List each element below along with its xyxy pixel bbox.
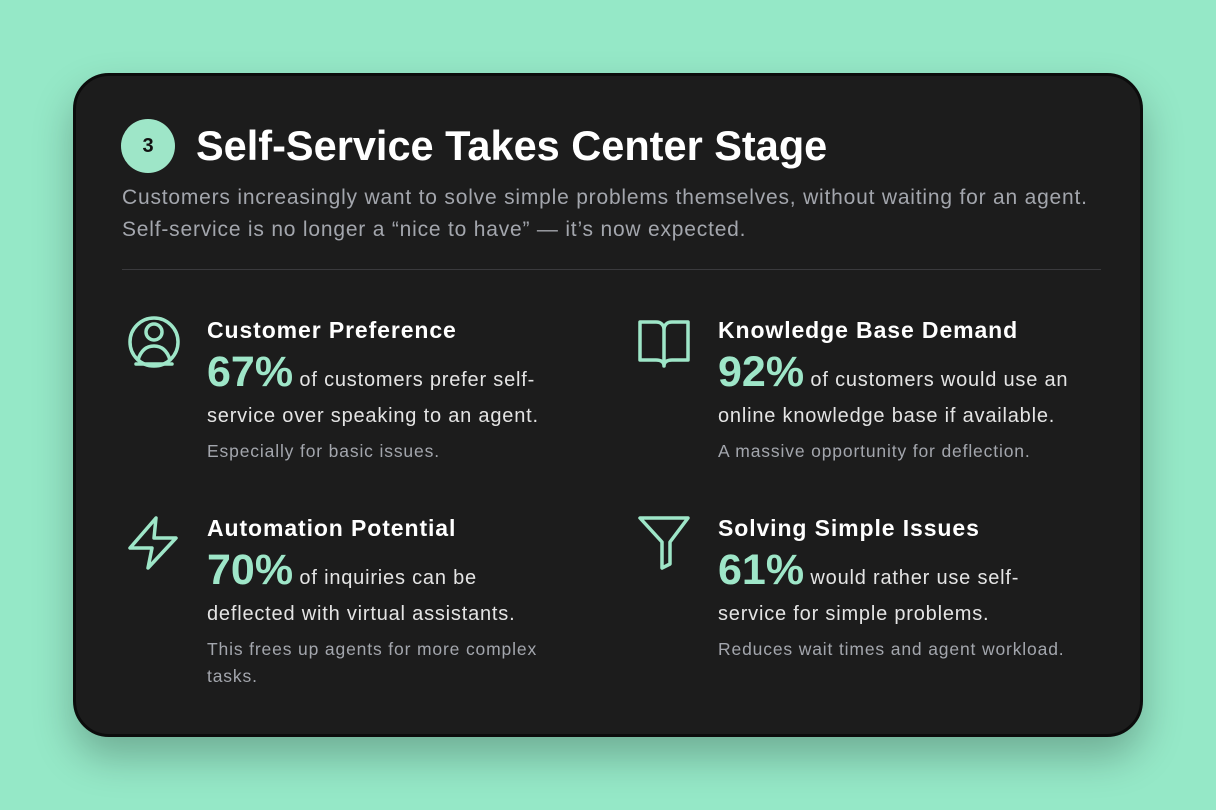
item: automation: [207, 515, 537, 686]
item: automation: deflected with virtual assistants.: [207, 603, 515, 625]
item: simple issues: service for simple problems.: [718, 603, 989, 625]
item: automation: tasks.: [207, 666, 258, 686]
card: [73, 73, 1143, 737]
item: simple issues: 61% would rather use self-: [718, 546, 1019, 594]
item: automation: This frees up agents for more complex: [207, 639, 537, 659]
item: automation: Automation Potential: [207, 515, 456, 541]
item: knowledge base: Knowledge Base Demand: [718, 317, 1018, 343]
badge number: [121, 119, 175, 173]
item: customer preference: [207, 317, 539, 461]
icon: person: [128, 316, 180, 368]
item: knowledge base: 92% of customers would use an: [718, 348, 1068, 396]
item: automation: 70% of inquiries can be: [207, 546, 477, 594]
item: customer preference: Especially for basic issues.: [207, 441, 440, 461]
item: knowledge base: A massive opportunity for deflection.: [718, 441, 1031, 461]
icon: lightning: [128, 516, 178, 570]
item: knowledge base: [718, 317, 1068, 461]
item: knowledge base: online knowledge base if available.: [718, 405, 1055, 427]
subtitle: [122, 186, 1088, 241]
icon: book: [638, 320, 690, 368]
item: customer preference: 67% of customers prefer self-: [207, 348, 535, 396]
item: customer preference: service over speaking to an agent.: [207, 405, 539, 427]
item: simple issues: Reduces wait times and agent workload.: [718, 639, 1064, 659]
subtitle: Self-service is no longer a “nice to have” — it’s now expected.: [122, 218, 746, 241]
title: Self-Service Takes Center Stage: [196, 122, 827, 169]
item: customer preference: Customer Preference: [207, 317, 457, 343]
item: simple issues: Solving Simple Issues: [718, 515, 980, 541]
subtitle: Customers increasingly want to solve simple problems themselves, without waiting for an agent.: [122, 186, 1088, 209]
item: simple issues: [718, 515, 1064, 659]
icon: funnel: [638, 516, 690, 570]
badge number: 3: [142, 135, 154, 157]
